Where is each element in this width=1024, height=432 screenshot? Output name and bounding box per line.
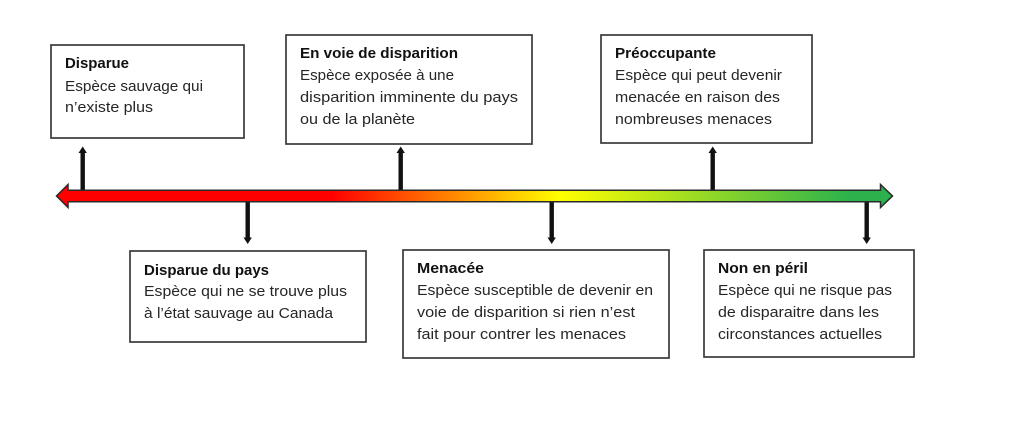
text: Disparue du pays description (144, 283, 347, 322)
arrow: up to Disparue (78, 146, 87, 192)
text: Menacée description: fait pour contrer les menaces (417, 326, 626, 343)
text: Disparue du pays description: à l’état sauvage au Canada (144, 305, 334, 322)
arrow: down to Non en péril (862, 201, 871, 244)
text: Préoccupante description (615, 67, 782, 128)
heading: Préoccupante: Préoccupante (615, 45, 716, 62)
panel: Préoccupante (601, 35, 812, 143)
panel: Non en péril (704, 250, 914, 357)
panel: Menacée (403, 250, 669, 358)
text: Préoccupante description: nombreuses menaces (615, 111, 772, 128)
heading: Non en péril: Non en péril (718, 260, 808, 277)
text: Préoccupante description: Espèce qui peut devenir (615, 67, 782, 84)
text: Non en péril description: de disparaitre dans les (718, 304, 879, 321)
text: Non en péril description: Espèce qui ne risque pas (718, 282, 892, 299)
text: Disparue description (65, 78, 203, 116)
arrow: up to En voie de disparition (397, 146, 405, 192)
text: Non en péril description (718, 282, 892, 343)
heading: Disparue: Disparue (65, 55, 129, 72)
heading: Menacée: Menacée (417, 260, 484, 277)
text: Disparue description: Espèce sauvage qui (65, 78, 203, 95)
text: Disparue description: n’existe plus (65, 99, 153, 116)
arrow: down to Menacée (548, 201, 556, 244)
text: Menacée description: voie de disparition si rien n’est (417, 304, 636, 321)
panel: Disparue (51, 45, 244, 138)
connector arrows (78, 146, 871, 244)
text: En voie de disparition description: Espèce exposée à une (300, 67, 454, 84)
panel: Disparue du pays (130, 251, 366, 342)
arrow: down to Disparue du pays (244, 201, 252, 244)
text: En voie de disparition description: ou de la planète (300, 111, 415, 128)
heading: En voie de disparition: En voie de disparition (300, 45, 458, 62)
gradient double-headed arrow scale (56, 184, 892, 208)
text: Menacée description: Espèce susceptible de devenir en (417, 282, 653, 299)
arrow: up to Préoccupante (708, 146, 717, 192)
text: Disparue du pays description: Espèce qui ne se trouve plus (144, 283, 347, 300)
heading: Disparue du pays: Disparue du pays (144, 262, 269, 279)
text: Menacée description (417, 282, 653, 343)
text: Préoccupante description: menacée en raison des (615, 89, 780, 106)
text: Non en péril description: circonstances actuelles (718, 326, 882, 343)
text: En voie de disparition description: disparition imminente du pays (300, 89, 518, 106)
text: En voie de disparition description (300, 67, 518, 128)
panel: En voie de disparition (286, 35, 532, 144)
